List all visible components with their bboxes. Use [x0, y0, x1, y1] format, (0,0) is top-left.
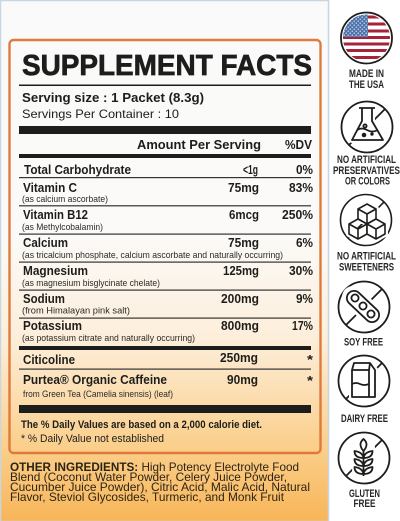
row: vitamin B12 [22, 208, 313, 233]
not established note: * % Daily Value not established [21, 433, 164, 445]
row: sodium [22, 292, 313, 316]
row: citicoline [23, 351, 313, 367]
row: sodium: 9% [296, 292, 313, 306]
row: citicoline: Citicoline [23, 353, 75, 367]
row: sodium: 200mg [221, 292, 259, 306]
icon: soy free [338, 282, 390, 332]
row: vitamin B12: 250% [282, 208, 313, 222]
row: potassium: Potassium [23, 319, 82, 333]
panel: supplement facts frame [10, 40, 320, 453]
label: gluten free: FREE [354, 498, 376, 510]
label: gluten free: GLUTEN [349, 488, 380, 500]
row: magnesium: (as magnesium bisglycinate chelate) [22, 278, 160, 289]
icon: no preservatives flask [342, 102, 392, 152]
other ingredients: OTHER INGREDIENTS: High Potency Electrolyte Food [10, 460, 299, 474]
row: vitamin C: 75mg [228, 181, 259, 195]
row: potassium: (as potassium citrate and naturally occurring) [22, 333, 195, 344]
label: made in the usa [349, 68, 384, 91]
row: vitamin C [22, 181, 313, 205]
icon: no sweeteners cubes [340, 194, 392, 246]
row: magnesium: Magnesium [23, 264, 88, 278]
icon: dairy free [338, 356, 390, 406]
label: made in the usa: MADE IN [349, 68, 384, 80]
row: vitamin B12: 6mcg [229, 208, 259, 222]
row: purtea organic caffeine: 90mg [227, 373, 258, 387]
servings per container: Servings Per Container : 10 [22, 107, 179, 121]
row: total carbohydrate: 0% [296, 163, 313, 177]
row: calcium: 6% [296, 236, 313, 250]
label: no artificial preservatives or colors [333, 154, 400, 188]
row: total carbohydrate: <1g [243, 163, 258, 177]
row: magnesium [22, 264, 313, 289]
other ingredients [10, 460, 310, 504]
row: purtea organic caffeine [23, 373, 313, 400]
icon: gluten free [338, 432, 390, 484]
row: vitamin C: 83% [289, 181, 313, 195]
table header [137, 138, 313, 152]
row: vitamin B12: Vitamin B12 [23, 208, 88, 222]
row: sodium: Sodium [23, 292, 65, 306]
row: purtea organic caffeine: from Green Tea (Camelia sinensis) (leaf) [23, 389, 173, 400]
other ingredients: Cucumber Juice Powder), Citric Acid, Malic Acid, Natural [10, 480, 310, 494]
row: vitamin C: Vitamin C [23, 181, 77, 195]
table header: %DV [285, 138, 313, 152]
row: potassium: 17% [292, 319, 313, 333]
row: calcium: Calcium [23, 236, 68, 250]
row: citicoline: * [307, 353, 313, 367]
row: calcium: (as tricalcium phosphate, calcium ascorbate and naturally occurring) [22, 250, 283, 261]
row: potassium [22, 319, 313, 344]
row: purtea organic caffeine: * [307, 374, 313, 388]
row: calcium [22, 236, 313, 261]
serving size: Serving size : 1 Packet (8.3g) [22, 91, 204, 105]
title: SUPPLEMENT FACTS [22, 50, 312, 82]
row: vitamin B12: (as Methylcobalamin) [22, 222, 103, 233]
row: magnesium: 30% [289, 264, 313, 278]
label: made in the usa: THE USA [349, 79, 384, 91]
row: magnesium: 125mg [223, 264, 259, 278]
daily value note: The % Daily Values are based on a 2,000 calorie diet. [21, 419, 262, 431]
row: purtea organic caffeine: Purtea® Organic Caffeine [23, 373, 167, 387]
row: citicoline: 250mg [220, 351, 258, 365]
icon: USA flag [340, 12, 394, 64]
other ingredients: Blend (Coconut Water Powder, Celery Juice Powder, [10, 470, 287, 484]
label: no artificial sweeteners [337, 250, 396, 274]
other ingredients: Flavor, Steviol Glycosides, Turmeric, and Monk Fruit [10, 490, 285, 504]
row: total carbohydrate [24, 163, 313, 177]
row: vitamin C: (as calcium ascorbate) [22, 194, 108, 205]
row: total carbohydrate: Total Carbohydrate [24, 163, 131, 177]
table header: Amount Per Serving [137, 138, 261, 152]
label: soy free: SOY FREE [344, 336, 383, 348]
label: gluten free [349, 488, 380, 510]
row: potassium: 800mg [221, 319, 259, 333]
row: calcium: 75mg [228, 236, 259, 250]
row: sodium: (from Himalayan pink salt) [22, 306, 130, 316]
